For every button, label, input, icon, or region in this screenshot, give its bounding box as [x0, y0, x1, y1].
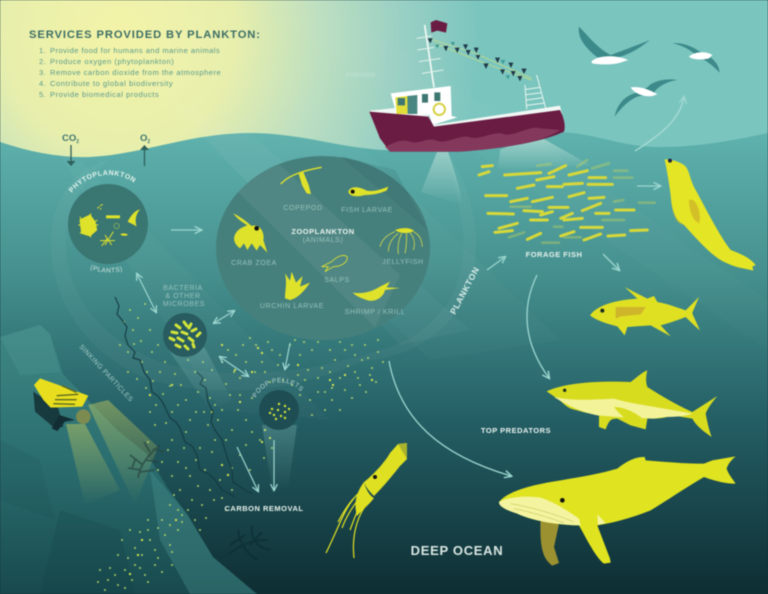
- bacteria label: BACTERIA: [163, 285, 203, 292]
- bunting: [428, 38, 532, 81]
- arrow: to whale: [389, 361, 511, 476]
- services list: 2.: [39, 57, 46, 66]
- bacteria label: MICROBES: [163, 301, 205, 308]
- arrow: to tuna: [603, 254, 619, 270]
- label: carbon removal: CARBON REMOVAL: [225, 504, 303, 513]
- boat light beams: [421, 134, 590, 205]
- seabird three: [615, 79, 677, 117]
- hull: [369, 110, 565, 152]
- O2 arrow: [140, 133, 150, 166]
- services list: 1.: [39, 46, 46, 55]
- arrow: to seal: [637, 185, 660, 187]
- ocean water: [0, 132, 768, 594]
- CO2 arrow: 2: [76, 139, 79, 145]
- CO2 arrow: CO: [62, 133, 76, 144]
- bacteria label: [163, 285, 205, 308]
- arrows: microbial loop and carbon removal: [137, 274, 290, 491]
- services list: Contribute to global biodiversity: [50, 79, 173, 88]
- sun rays: [0, 0, 768, 420]
- arrow: zooplankton to forage fish: [487, 257, 505, 270]
- sinking particle dots: [98, 304, 383, 590]
- services list: 5.: [39, 90, 46, 99]
- coral on rock: [128, 442, 164, 478]
- panel: poop pellets: POOP PELLETS: [252, 377, 304, 398]
- label: fishing: FISHING: [346, 72, 376, 79]
- services list: Remove carbon dioxide from the atmosphere: [50, 68, 221, 77]
- title: SERVICES PROVIDED BY PLANKTON:: [29, 29, 260, 41]
- seabird two: [672, 43, 720, 73]
- services list: Provide food for humans and marine animals: [50, 46, 220, 55]
- deck: [370, 106, 562, 127]
- boat: [369, 20, 565, 152]
- zooplankton creatures: [233, 167, 422, 301]
- flag: [431, 20, 447, 33]
- ladder: [525, 75, 546, 109]
- ROV light beams: [66, 400, 158, 505]
- zooplankton labels: FISH LARVAE: [341, 207, 393, 214]
- CO2 arrow: [62, 133, 79, 166]
- zooplankton labels: COPEPOD: [283, 205, 323, 212]
- bacteria label: & OTHER: [165, 293, 201, 300]
- panel: phytoplankton: [68, 170, 148, 273]
- label: deep ocean: DEEP OCEAN: [411, 543, 503, 558]
- label: top predators: TOP PREDATORS: [481, 426, 551, 435]
- O2 arrow: O: [140, 133, 147, 144]
- squid: [326, 443, 407, 558]
- zooplankton labels: URCHIN LARVAE: [260, 303, 324, 310]
- label: sinking particles: SINKING PARTICLES: [78, 344, 134, 404]
- seaweed in deep water: [228, 525, 270, 560]
- services list: Produce oxygen (phytoplankton): [50, 57, 174, 66]
- cabin: [391, 86, 457, 125]
- seal: [665, 159, 756, 271]
- label: forage fish: FORAGE FISH: [526, 250, 582, 259]
- whale: [499, 456, 736, 566]
- forage fish school: [479, 160, 655, 243]
- services list: Provide biomedical products: [50, 90, 159, 99]
- panel: phytoplankton: (PLANTS): [90, 264, 123, 273]
- zooplankton labels: SHRIMP / KRILL: [345, 309, 405, 316]
- services list: 4.: [39, 79, 46, 88]
- zooplankton labels: SALPS: [324, 277, 350, 284]
- arrow: to seabirds: [635, 97, 684, 151]
- sinking strings: [115, 297, 252, 497]
- O2 arrow: 2: [147, 139, 150, 145]
- life ring: [434, 104, 445, 115]
- panel: bacteria and microbes: [163, 313, 232, 410]
- zooplankton labels: JELLYFISH: [382, 259, 424, 266]
- zooplankton labels: CRAB ZOEA: [231, 260, 277, 267]
- panel: zooplankton: [216, 156, 430, 340]
- mast: [425, 25, 434, 87]
- tuna: [590, 287, 700, 336]
- panel: phytoplankton: PHYTOPLANKTON: [68, 170, 136, 193]
- services list: 3.: [39, 68, 46, 77]
- label: plankton: PLANKTON: [448, 265, 481, 316]
- seafloor rock: [0, 325, 257, 594]
- shark: [547, 370, 717, 437]
- plankton zone band: [51, 150, 476, 390]
- zooplankton labels: ZOOPLANKTON: [291, 227, 355, 236]
- zooplankton labels: [231, 205, 424, 316]
- arrow: to shark: [527, 275, 549, 378]
- arrow: phytoplankton to zooplankton: [171, 229, 201, 231]
- underwater robot: [33, 378, 91, 431]
- services list: [39, 46, 221, 99]
- panel: poop pellets: [252, 377, 304, 474]
- seabird one: [579, 27, 650, 64]
- zooplankton labels: (ANIMALS): [303, 237, 343, 244]
